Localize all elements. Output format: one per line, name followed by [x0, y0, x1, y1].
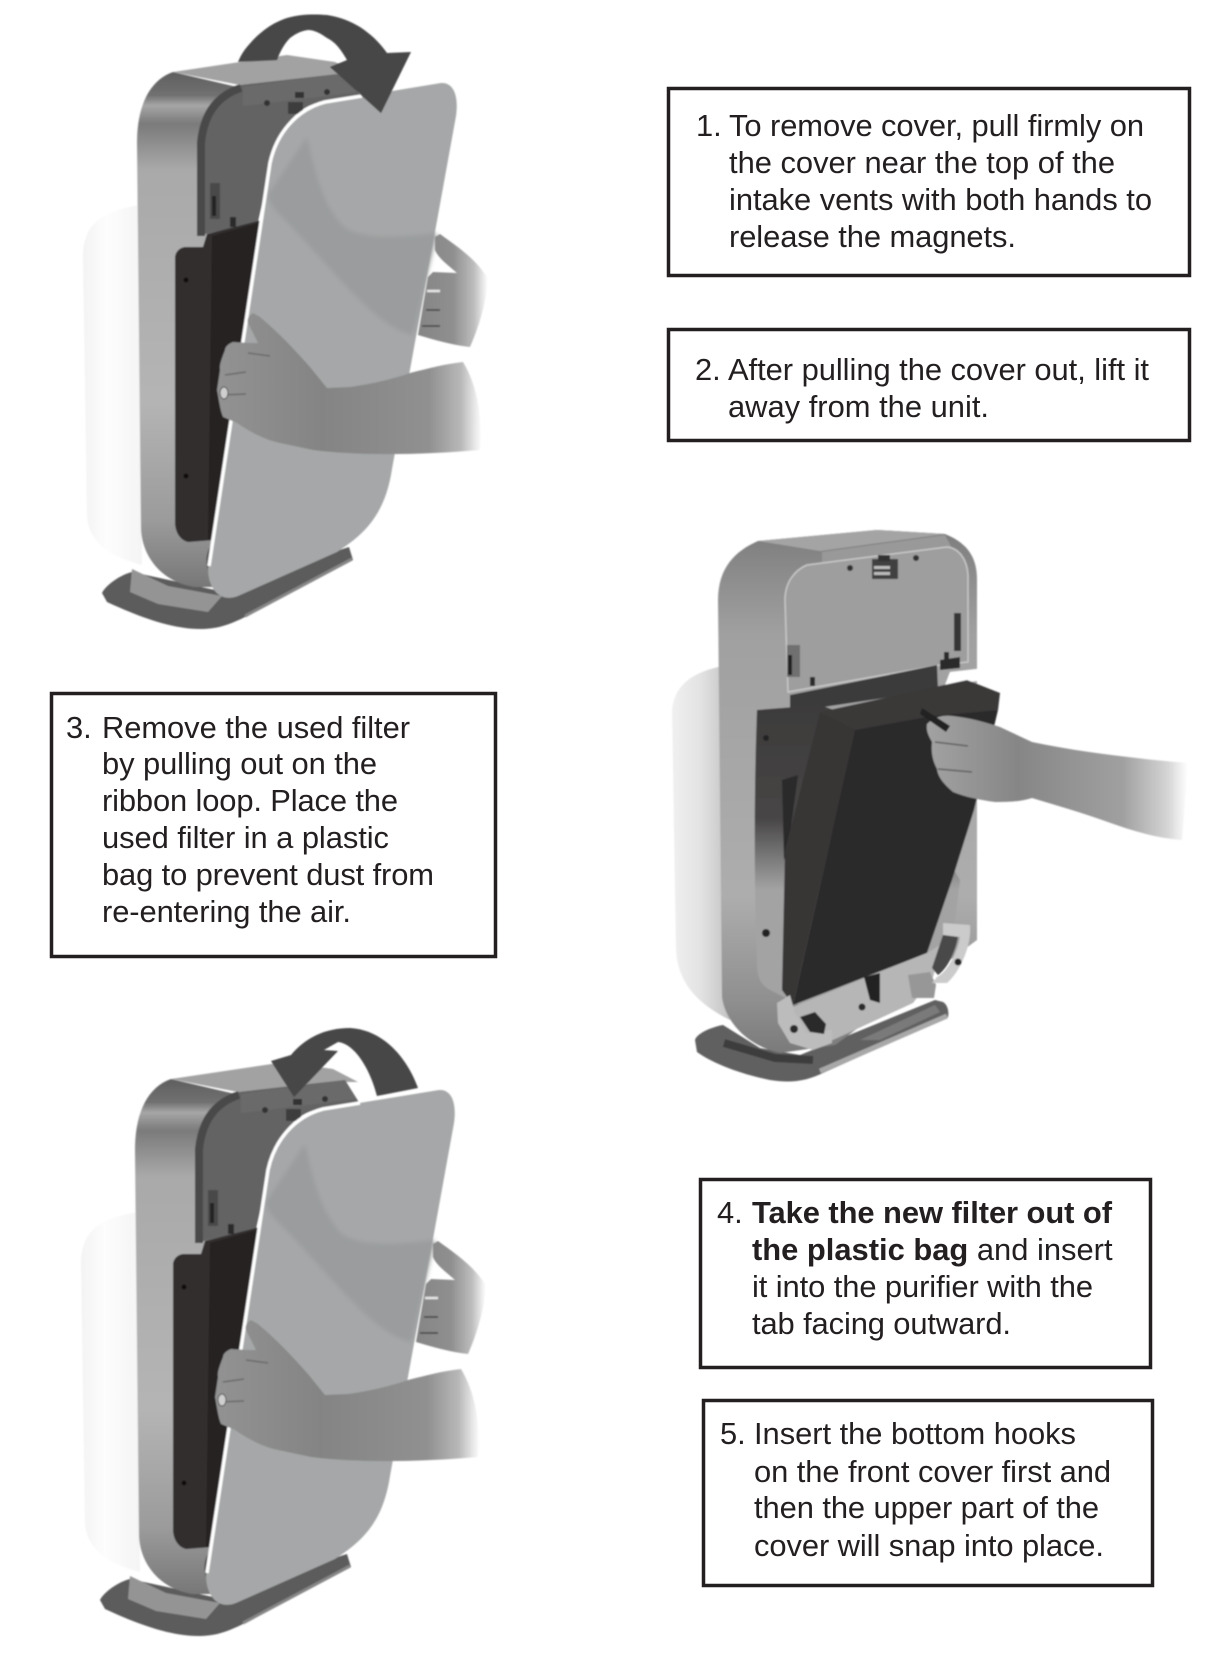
text: step 2 instructions: After pulling the cover out, lift it — [728, 352, 1149, 387]
text: step 4 instructions: Take the new filter out of — [752, 1195, 1113, 1230]
text: step 5 instructions: then the upper part of the — [754, 1490, 1099, 1525]
text: step 3 instructions — [66, 710, 434, 929]
illustration: step 1 purifier with cover being removed — [83, 55, 487, 629]
text: step 2 instructions — [695, 352, 1149, 424]
panel: step 2 — [668, 330, 1190, 440]
text: step 3 instructions: Remove the used filter — [102, 710, 410, 745]
text: step 4 instructions: tab facing outward. — [752, 1306, 1011, 1341]
text: step 5 instructions: on the front cover first and — [754, 1454, 1111, 1489]
text: step 5 instructions — [720, 1416, 1111, 1563]
panel: step 3 — [52, 694, 496, 956]
panel: step 1 — [668, 88, 1190, 276]
text: step 1 instructions — [696, 108, 1152, 254]
purifier body — [672, 530, 985, 1081]
panel: step 5 — [704, 1400, 1152, 1586]
text: step 3 instructions: 3. — [66, 710, 92, 745]
text: step 5 instructions: 5. — [720, 1416, 746, 1451]
text: step 4 instructions: 4. — [717, 1195, 743, 1230]
hand pulling the filter tab — [920, 708, 1188, 840]
filter and back plate — [755, 680, 1000, 1050]
text: step 1 instructions: the cover near the top of the — [729, 145, 1115, 180]
text: step 1 instructions: To remove cover, pull firmly on — [729, 108, 1144, 143]
text: step 2 instructions: away from the unit. — [728, 389, 989, 424]
text: step 5 instructions: Insert the bottom hooks — [754, 1416, 1076, 1451]
illustration: step 3 purifier with filter being pulled out — [672, 530, 1188, 1081]
text: step 4 instructions: it into the purifier with the — [752, 1269, 1093, 1304]
text: step 3 instructions: re-entering the air. — [102, 894, 351, 929]
arrow: cover pulled forward — [238, 14, 411, 113]
illustration: step 5 purifier with cover being replaced — [81, 1062, 485, 1636]
arrow: cover pushed back — [271, 1028, 418, 1097]
text: step 2 instructions: 2. — [695, 352, 721, 387]
panel: step 4 — [700, 1180, 1150, 1368]
text: step 4 instructions: the plastic bag and insert — [752, 1232, 1113, 1267]
text: step 3 instructions: used filter in a plastic — [102, 820, 389, 855]
text: step 3 instructions: bag to prevent dust from — [102, 857, 434, 892]
text: step 1 instructions: release the magnets. — [729, 219, 1016, 254]
text: step 3 instructions: ribbon loop. Place the — [102, 783, 398, 818]
text: step 4 instructions — [717, 1195, 1113, 1341]
text: step 1 instructions: 1. — [696, 108, 722, 143]
text: step 1 instructions: intake vents with both hands to — [729, 182, 1152, 217]
text: step 5 instructions: cover will snap into place. — [754, 1528, 1104, 1563]
text: step 3 instructions: by pulling out on the — [102, 746, 377, 781]
